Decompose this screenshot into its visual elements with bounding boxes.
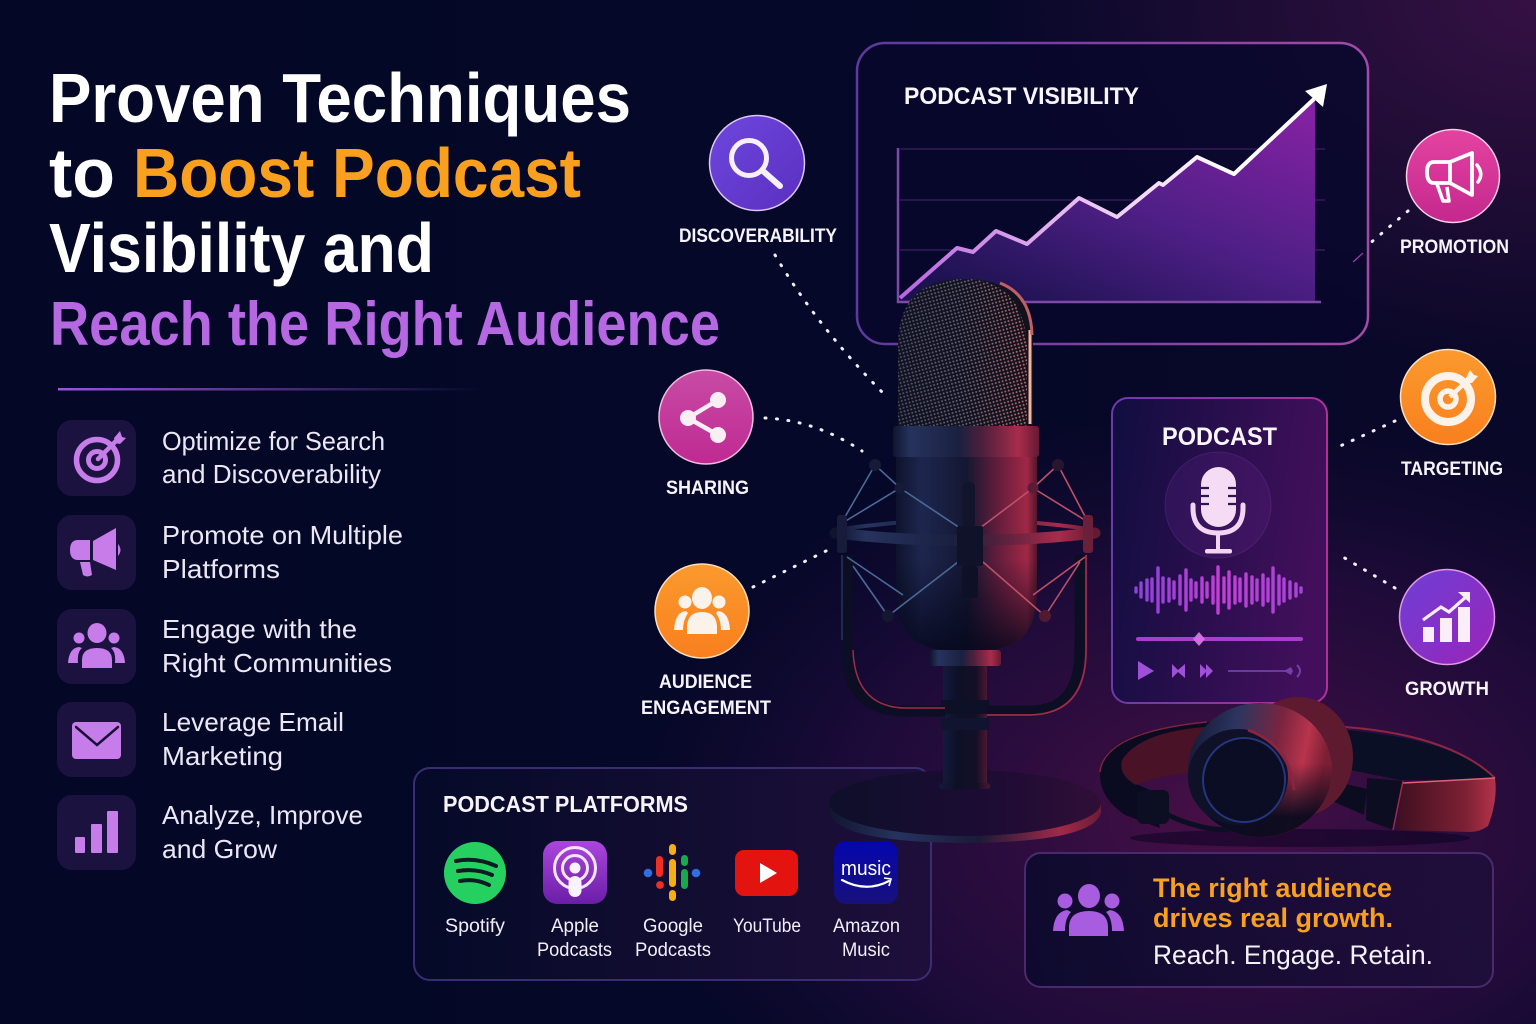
item: engage communities: Engage with the <box>162 614 357 644</box>
icon: audience <box>1053 884 1124 936</box>
icon: amazon music: Music <box>842 940 890 961</box>
title: Boost Podcast <box>133 134 581 212</box>
grille <box>898 279 1034 426</box>
item: promote on platforms: Platforms <box>162 554 280 584</box>
icon: amazon music <box>833 841 900 961</box>
right band <box>1325 727 1496 832</box>
icon: youtube: YouTube <box>733 916 801 937</box>
ear pad <box>1243 697 1353 817</box>
icon: spotify: Spotify <box>445 916 506 937</box>
badge: targeting <box>1400 350 1503 480</box>
item: optimize for search <box>57 420 385 496</box>
item: optimize for search: and Discoverability <box>162 459 381 489</box>
badge: discoverability: DISCOVERABILITY <box>679 226 837 247</box>
callout: right audience <box>1025 853 1493 987</box>
waveform <box>1136 567 1301 613</box>
playback controls <box>1138 661 1300 680</box>
shock mount <box>835 459 1095 622</box>
microphone illustration <box>829 270 1101 843</box>
icon: microphone <box>1165 452 1271 558</box>
item: email marketing: Leverage Email <box>162 707 344 737</box>
panel: podcast visibility chart <box>857 43 1368 344</box>
title: Proven Techniques <box>49 59 631 137</box>
icon: youtube <box>733 850 801 937</box>
item: engage communities <box>57 609 392 684</box>
technique list <box>57 420 403 870</box>
mic collar <box>893 426 1039 457</box>
ring back <box>835 520 1095 530</box>
callout: right audience: drives real growth. <box>1153 903 1393 933</box>
badge: sharing: SHARING <box>666 478 749 499</box>
item: analyze and grow: and Grow <box>162 834 277 864</box>
ring front <box>835 533 1095 540</box>
badge: discoverability <box>679 116 837 247</box>
mic stand pole <box>939 666 990 789</box>
area chart <box>898 84 1327 302</box>
icon: google podcasts: Google <box>643 916 703 937</box>
badge: audience engagement <box>641 564 771 719</box>
divider <box>58 388 482 390</box>
platforms heading: PODCAST PLATFORMS <box>443 791 688 817</box>
mic base <box>829 770 1101 843</box>
badge: promotion: PROMOTION <box>1400 237 1509 258</box>
chart title: PODCAST VISIBILITY <box>904 83 1139 110</box>
badge: sharing <box>659 370 753 499</box>
title: Reach the Right Audience <box>50 290 720 359</box>
item: email marketing <box>57 702 344 777</box>
panel: podcast platforms <box>414 768 931 980</box>
icon: google podcasts: Podcasts <box>635 940 711 961</box>
icon: amazon music: music <box>841 858 891 880</box>
headphones illustration <box>1100 697 1496 847</box>
icon: apple podcasts: Apple <box>551 916 599 937</box>
mic body <box>896 457 1037 650</box>
badge: growth <box>1400 570 1494 700</box>
player title: PODCAST <box>1162 423 1277 451</box>
ear cup <box>1188 703 1332 837</box>
item: analyze and grow <box>57 795 363 870</box>
item: engage communities: Right Communities <box>162 648 392 678</box>
mic neck <box>930 650 1001 666</box>
item: promote on platforms <box>57 515 403 590</box>
left band <box>1100 722 1230 830</box>
badge: audience engagement: AUDIENCE <box>659 672 752 693</box>
item: analyze and grow: Analyze, Improve <box>162 800 363 830</box>
badge: growth: GROWTH <box>1405 679 1489 700</box>
icon: apple podcasts <box>537 841 612 961</box>
item: promote on platforms: Promote on Multiple <box>162 520 403 550</box>
title <box>49 59 720 359</box>
panel: podcast player <box>1112 398 1327 703</box>
title: to <box>49 134 115 212</box>
callout: right audience: Reach. Engage. Retain. <box>1153 940 1433 970</box>
callout text: The right audience <box>1153 873 1392 903</box>
floor shadow <box>1130 829 1470 847</box>
cradle <box>847 555 1080 711</box>
icon: google podcasts <box>635 844 711 961</box>
item: email marketing: Marketing <box>162 741 283 771</box>
item: optimize for search: Optimize for Search <box>162 426 385 456</box>
badge: promotion <box>1400 130 1509 258</box>
progress slider <box>1136 632 1303 646</box>
icon: apple podcasts: Podcasts <box>537 940 612 961</box>
icon: spotify <box>444 842 506 937</box>
badge: audience engagement: ENGAGEMENT <box>641 698 771 719</box>
badge: targeting: TARGETING <box>1401 459 1503 480</box>
title: Visibility and <box>49 209 434 287</box>
icon: amazon music: Amazon <box>833 916 900 937</box>
connector lines <box>753 211 1408 588</box>
arrow head <box>1305 84 1327 107</box>
